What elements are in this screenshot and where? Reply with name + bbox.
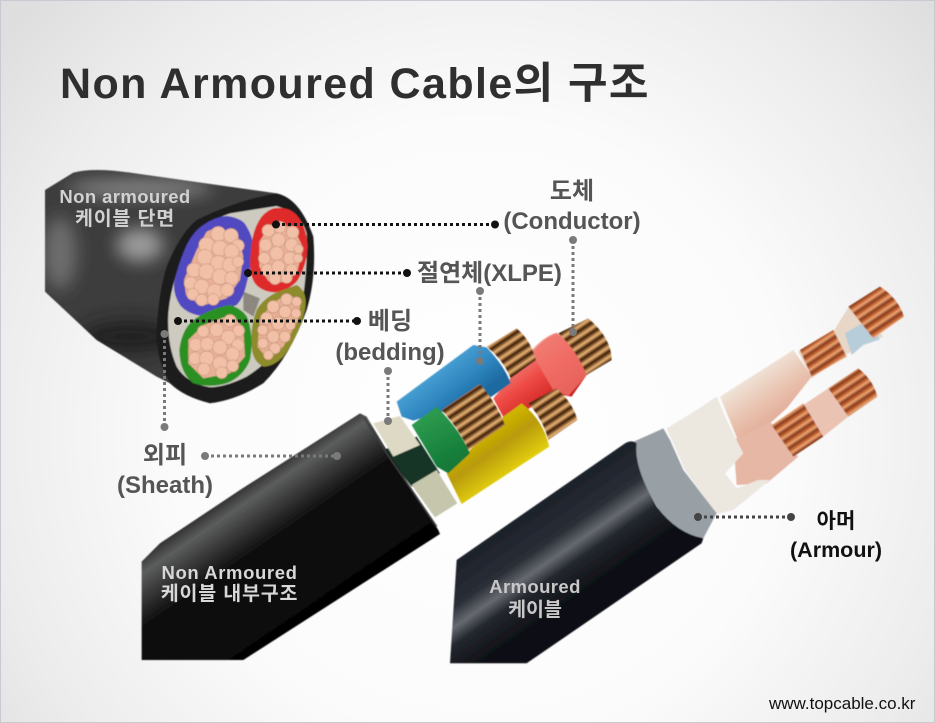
label: bedding: 베딩 — [368, 308, 412, 335]
white wrap — [667, 397, 770, 514]
caption: armoured cable: 케이블 — [508, 599, 562, 621]
leader: insulation on cross-section — [244, 269, 411, 277]
bedding filler — [168, 206, 307, 387]
label: armour: 아머 — [817, 510, 855, 533]
leader: sheath horizontal — [201, 452, 341, 460]
leader: insulation vertical — [476, 287, 484, 365]
red core — [250, 208, 308, 292]
blue core — [397, 328, 536, 421]
title: Non Armoured Cable의 구조 — [60, 60, 650, 108]
leader: bedding vertical — [384, 367, 392, 425]
label: conductor: 도체 — [550, 178, 594, 205]
website url: www.topcable.co.kr — [768, 694, 916, 713]
label: bedding: (bedding) — [335, 339, 445, 366]
armour band — [630, 428, 717, 538]
body highlights — [43, 180, 213, 353]
outer sheath face — [156, 193, 314, 403]
cable jacket — [450, 441, 703, 663]
label: armour — [790, 510, 882, 562]
caption: non armoured cross-section: Non armoured — [59, 186, 191, 207]
label: insulation XLPE: 절연체(XLPE) — [417, 260, 562, 287]
armoured cable photo — [450, 287, 904, 663]
leader: bedding on cross-section — [174, 317, 361, 325]
leader: armour — [694, 513, 795, 521]
caption: non armoured internal structure: Non Armoured — [161, 562, 298, 583]
lower core — [733, 368, 877, 485]
label: conductor — [503, 178, 641, 235]
blue core — [174, 216, 253, 316]
leader: conductor on cross-section — [272, 220, 499, 228]
outer pale core — [798, 287, 904, 378]
lower bedding — [412, 470, 457, 517]
label: sheath — [117, 442, 213, 499]
centre gap — [243, 292, 260, 317]
yellow core — [447, 388, 577, 504]
red core — [493, 318, 612, 423]
label: sheath: 외피 — [143, 442, 187, 469]
caption: armoured cable: Armoured — [489, 576, 581, 597]
label: conductor: (Conductor) — [503, 208, 641, 235]
leader: sheath vertical — [160, 330, 168, 431]
caption: non armoured internal structure: 케이블 내부구조 — [161, 583, 298, 605]
leader: conductor vertical — [569, 236, 577, 336]
green core — [179, 305, 252, 386]
caption: non armoured cross-section — [59, 186, 191, 230]
green core — [412, 384, 505, 473]
caption: non armoured internal structure — [161, 562, 298, 605]
non armoured cable photo — [142, 318, 612, 660]
cross-section cable photo — [43, 170, 314, 403]
cable jacket — [142, 413, 440, 660]
caption: armoured cable — [489, 576, 581, 621]
label: armour: (Armour) — [790, 538, 882, 562]
caption: non armoured cross-section: 케이블 단면 — [75, 208, 175, 230]
label: sheath: (Sheath) — [117, 472, 213, 499]
jacket edge — [364, 417, 437, 527]
dark interior — [383, 437, 440, 487]
label: bedding — [335, 308, 445, 366]
upper bedding — [373, 416, 420, 457]
olive core — [251, 285, 306, 367]
cable body side — [45, 170, 297, 403]
main pale core — [720, 350, 812, 453]
